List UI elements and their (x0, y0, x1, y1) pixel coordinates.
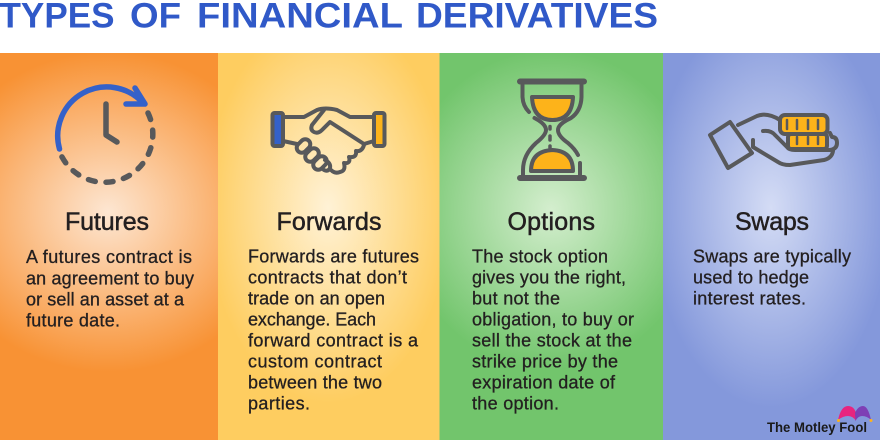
panel: futures (0, 53, 218, 440)
icon: hand holding coins (710, 115, 837, 168)
text: forwards description: contracts that don’t (248, 268, 407, 288)
heading: Swaps: Swaps (735, 208, 809, 236)
text: options description (472, 246, 634, 414)
text: forwards description: between the two (248, 372, 382, 392)
text: swaps description (693, 246, 851, 308)
text: futures description (26, 247, 194, 330)
text: swaps description: Swaps are typically (693, 246, 851, 266)
text: options description: obligation, to buy or (472, 310, 634, 330)
panel: options (440, 53, 663, 440)
text: forwards description: parties. (248, 394, 310, 414)
text: futures description: future date. (26, 310, 120, 330)
icon: handshake (272, 108, 384, 173)
title (0, 0, 658, 36)
heading: Futures: Futures (65, 208, 149, 236)
text: options description: strike price by the (472, 352, 618, 372)
icon: hourglass (520, 82, 584, 178)
panel: forwards (218, 53, 440, 440)
text: options description: The stock option (472, 246, 608, 266)
text: options description: expiration date of (472, 372, 616, 392)
text: forwards description: exchange. Each (248, 310, 376, 330)
text: futures description: A futures contract is (26, 247, 192, 267)
text: options description: but not the (472, 288, 560, 308)
text: forwards description: trade on an open (248, 288, 385, 308)
heading: Options: Options (508, 208, 595, 236)
text: futures description: or sell an asset at a (26, 290, 185, 310)
icon: clock with arrow (58, 87, 153, 182)
text: swaps description: interest rates. (693, 288, 806, 308)
logo: The Motley Fool: The Motley Fool (767, 419, 867, 435)
text: forwards description: forward contract is a (248, 330, 419, 350)
text: options description: gives you the right, (472, 268, 626, 288)
text: options description: sell the stock at the (472, 330, 632, 350)
heading: Forwards: Forwards (276, 208, 382, 236)
text: futures description: an agreement to buy (26, 268, 194, 288)
text: forwards description: Forwards are futures (248, 246, 419, 266)
text: forwards description: custom contract (248, 352, 382, 372)
text: options description: the option. (472, 394, 559, 414)
icon: jester hat (837, 406, 872, 422)
logo: The Motley Fool (767, 406, 872, 435)
text: forwards description (248, 246, 419, 414)
panel: swaps (663, 53, 880, 440)
text: swaps description: used to hedge (693, 268, 809, 288)
